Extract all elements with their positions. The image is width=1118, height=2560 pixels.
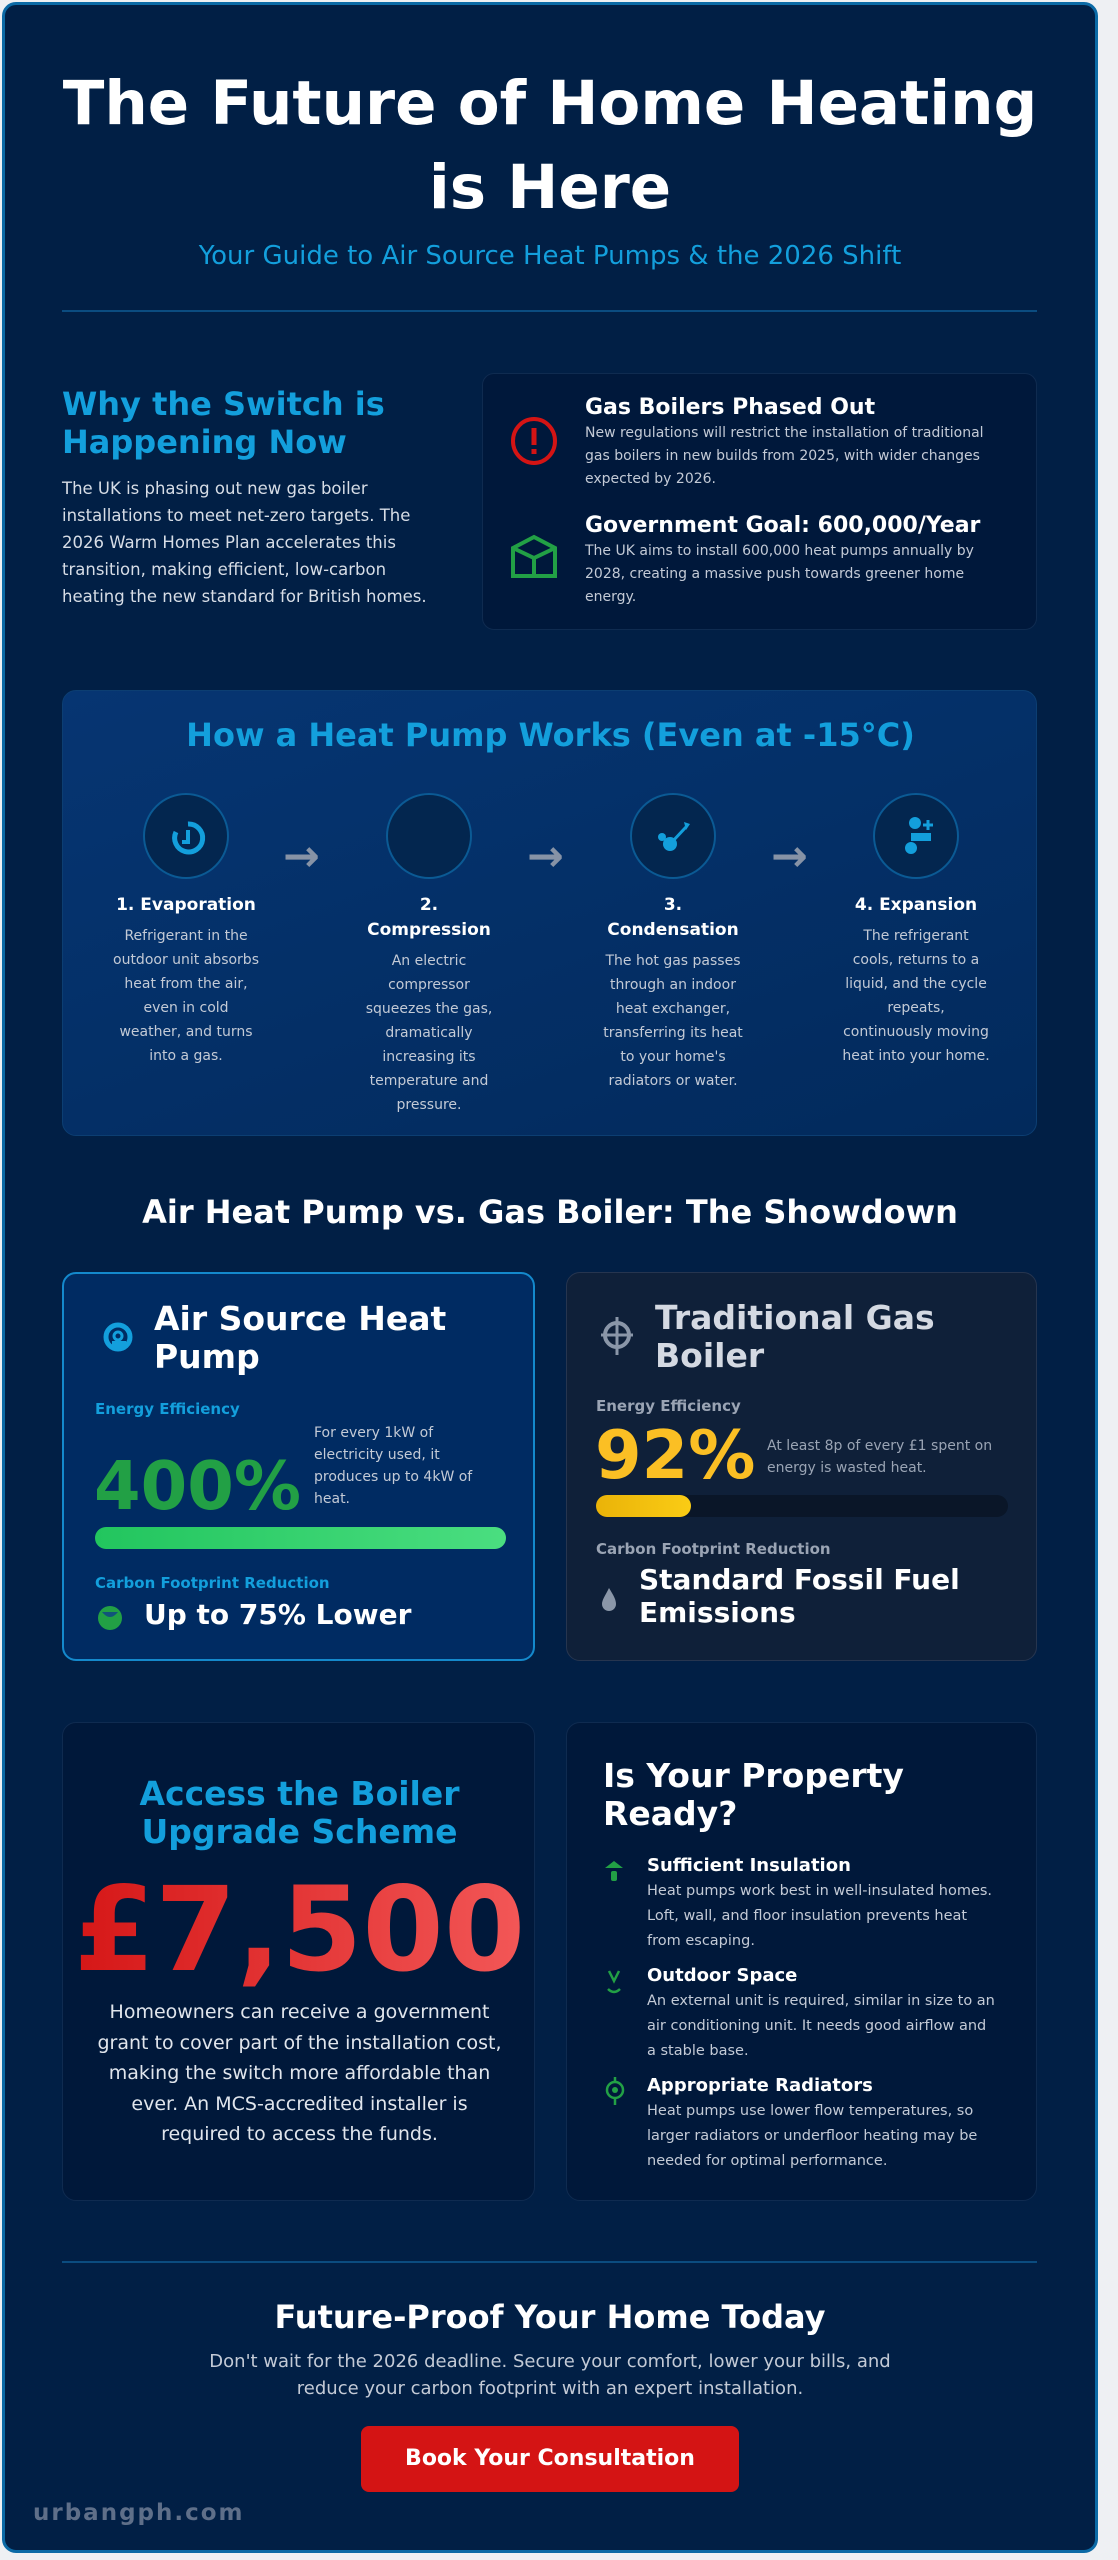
label: carbon: Carbon Footprint Reduction <box>596 1540 831 1558</box>
icon: condensation <box>630 793 716 879</box>
text: cta paragraph: Don't wait for the 2026 deadline. Secure your comfort, lower your bills, and reduce your carbon footprint with an expert installation. <box>209 2351 891 2399</box>
panel: property ready: Heat pumps use lower flow temperatures, so <box>647 2103 973 2119</box>
panel: property ready: Appropriate Radiators <box>647 2075 873 2096</box>
panel: property ready: needed for optimal performance. <box>647 2153 887 2169</box>
fact: gas boilers: New regulations will restrict the installation of traditional gas boilers in new builds from 2025, with wider changes expected by 2026. <box>585 425 984 487</box>
arrow 2: → <box>527 831 564 882</box>
step 2 <box>366 793 492 1113</box>
card title: Pump <box>154 1337 260 1376</box>
card title: Boiler <box>655 1336 764 1375</box>
label: energy efficiency: Energy Efficiency <box>95 1400 240 1418</box>
card title: Traditional Gas <box>655 1298 935 1337</box>
icon: boiler <box>601 1317 633 1355</box>
heading: grant: Access the Boiler <box>139 1774 460 1813</box>
step 1 <box>113 793 259 1064</box>
panel: gas boiler card <box>566 1272 1037 1661</box>
panel: key facts <box>482 373 1037 630</box>
step 2: Compression <box>367 920 491 940</box>
heading: ready <box>603 1756 904 1833</box>
fact: government goal <box>584 513 980 605</box>
label: carbon: Carbon Footprint Reduction <box>95 1574 330 1592</box>
panel: property ready <box>566 1722 1037 2201</box>
button: book consultation <box>361 2426 739 2492</box>
step 3: 3. <box>664 895 682 915</box>
icon: outdoor <box>607 1970 621 1994</box>
icon: warning <box>511 417 557 465</box>
panel: property ready: larger radiators or underfloor heating may be <box>647 2128 977 2144</box>
panel: property ready: Heat pumps work best in well-insulated homes. <box>647 1883 992 1899</box>
title <box>63 68 1037 223</box>
stat: 92%: 92% <box>595 1416 755 1494</box>
item: radiators <box>606 2075 977 2169</box>
label: energy efficiency: Energy Efficiency <box>596 1397 741 1415</box>
step 1: heat from the air, <box>124 976 248 992</box>
icon: evaporation <box>143 793 229 879</box>
arrow 3: → <box>771 831 808 882</box>
card title: Air Source Heat <box>154 1299 446 1338</box>
card title <box>655 1298 935 1375</box>
heading: how it works: How a Heat Pump Works (Even at -15°C) <box>186 716 915 754</box>
stat: fossil fuel: Standard Fossil Fuel <box>639 1563 960 1596</box>
panel: how a heat pump works <box>62 690 1037 1136</box>
fact: gas boilers: Gas Boilers Phased Out <box>585 395 875 420</box>
step 1: into a gas. <box>149 1048 223 1064</box>
icon: house <box>511 534 557 578</box>
fact: government goal: The UK aims to install 600,000 heat pumps annually by 2028, creating a massive push towards greener home energy. <box>585 543 974 605</box>
subtitle: Your Guide to Air Source Heat Pumps & the 2026 Shift <box>199 241 901 271</box>
step 1: weather, and turns <box>119 1024 253 1040</box>
step 4: continuously moving <box>843 1024 989 1040</box>
title: The Future of Home Heating <box>63 68 1037 139</box>
icon: heat pump <box>104 1322 132 1352</box>
panel: property ready: from escaping. <box>647 1933 755 1949</box>
step 4: 4. Expansion <box>855 895 977 915</box>
text: efficiency note: At least 8p of every £1 spent on energy is wasted heat. <box>767 1438 992 1476</box>
heading: ready: Ready? <box>603 1794 737 1833</box>
step 4 <box>842 793 990 1064</box>
icon: radiator <box>606 2077 624 2105</box>
item: insulation <box>605 1855 992 1949</box>
icon: expansion <box>873 793 959 879</box>
heading: future-proof: Future-Proof Your Home Today <box>275 2298 825 2336</box>
stat: 400%: 400% <box>94 1447 301 1525</box>
heading: grant <box>139 1774 460 1851</box>
text: why paragraph: The UK is phasing out new gas boiler installations to meet net-zero targets. The 2026 Warm Homes Plan accelerates this transition, making efficient, low-carbon heating the new standard for British homes. <box>62 479 427 606</box>
step 2: 2. <box>420 895 438 915</box>
stat: £7,500: £7,500 <box>74 1861 525 1998</box>
panel: property ready: Loft, wall, and floor insulation prevents heat <box>647 1908 967 1924</box>
card title <box>154 1299 446 1376</box>
step 2: An electric compressor squeezes the gas, dramatically increasing its temperature and pressure. <box>366 953 492 1113</box>
step 3: The hot gas passes through an indoor heat exchanger, transferring its heat to your home's radiators or water. <box>603 953 743 1089</box>
stat: up to 75% lower: Up to 75% Lower <box>144 1598 411 1631</box>
icon: compression <box>386 793 472 879</box>
stat: fossil fuel: Emissions <box>639 1596 796 1629</box>
step 4: liquid, and the cycle <box>845 976 987 992</box>
step 3 <box>603 793 743 1089</box>
stat: fossil fuel <box>639 1563 960 1629</box>
text: grant description: Homeowners can receive a government grant to cover part of the installation cost, making the switch more affordable than ever. An MCS-accredited installer is required to access the funds. <box>97 2001 502 2145</box>
step 1: outdoor unit absorbs <box>113 952 259 968</box>
panel: property ready: An external unit is required, similar in size to an <box>647 1993 995 2009</box>
panel: property ready: Sufficient Insulation <box>647 1855 851 1876</box>
panel: property ready: air conditioning unit. It needs good airflow and <box>647 2018 986 2034</box>
fact: government goal: Government Goal: 600,000/Year <box>585 513 980 538</box>
arrow 1: → <box>283 831 320 882</box>
bar: 400% <box>95 1527 506 1549</box>
item: outdoor space <box>607 1965 995 2059</box>
heading: ready: Is Your Property <box>603 1756 904 1795</box>
step 1: even in cold <box>143 1000 229 1016</box>
button: book consultation: Book Your Consultation <box>405 2446 695 2471</box>
watermark: urbangph.com <box>33 2500 245 2526</box>
icon: globe <box>98 1606 122 1630</box>
step 3: Condensation <box>607 920 739 940</box>
heading: showdown: Air Heat Pump vs. Gas Boiler: The Showdown <box>142 1193 958 1231</box>
panel: boiler upgrade scheme <box>62 1722 535 2201</box>
step 4: heat into your home. <box>842 1048 990 1064</box>
heading: why: Why the Switch is Happening Now <box>62 385 385 461</box>
panel: property ready: Outdoor Space <box>647 1965 797 1986</box>
title: is Here <box>429 152 671 223</box>
step 4: repeats, <box>887 1000 945 1016</box>
step 1: 1. Evaporation <box>116 895 256 915</box>
panel: air source heat pump card <box>62 1272 535 1661</box>
section: why the switch <box>62 385 427 606</box>
panel: property ready: a stable base. <box>647 2043 749 2059</box>
fact: gas boilers <box>585 395 984 487</box>
step 4: The refrigerant <box>863 928 969 944</box>
step 1: Refrigerant in the <box>124 928 248 944</box>
bar: 92% <box>596 1495 1008 1517</box>
step 4: cools, returns to a <box>853 952 979 968</box>
text: efficiency note: For every 1kW of electricity used, it produces up to 4kW of heat. <box>314 1425 472 1507</box>
heading: grant: Upgrade Scheme <box>141 1812 458 1851</box>
icon: insulation <box>605 1861 623 1881</box>
icon: flame <box>602 1588 616 1611</box>
